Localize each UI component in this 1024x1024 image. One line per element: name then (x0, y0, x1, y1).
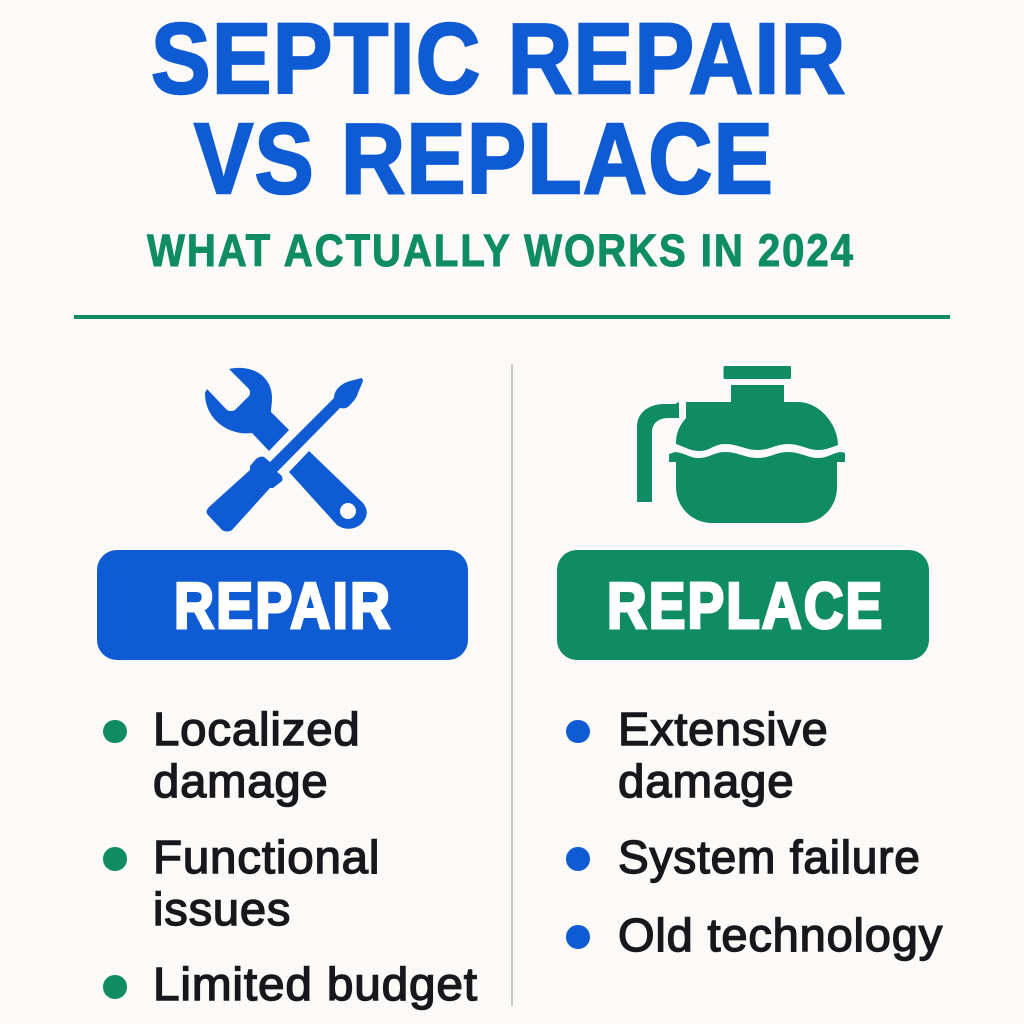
icon: wrench and screwdriver (205, 368, 367, 532)
list: repair: Limited budget (153, 958, 478, 1010)
button: replace (557, 550, 929, 660)
list: repair (103, 703, 478, 1010)
list: replace: Extensive (618, 703, 829, 755)
list: replace: Old technology (618, 909, 943, 961)
button: repair (97, 550, 468, 660)
subtitle: WHAT ACTUALLY WORKS IN 2024 (147, 225, 855, 276)
title: VS REPLACE (194, 103, 774, 215)
title: SEPTIC REPAIR (150, 3, 846, 115)
list: replace: System failure (618, 830, 921, 882)
list: repair: Functional (153, 830, 380, 882)
list: repair: Localized (153, 703, 361, 755)
list: replace (566, 703, 944, 962)
list: replace: damage (618, 755, 795, 807)
icon: septic tank (637, 366, 845, 523)
list: repair: damage (153, 755, 328, 807)
list: repair: issues (153, 883, 291, 935)
title (150, 3, 846, 215)
button label: repair: REPAIR (174, 569, 392, 642)
button label: replace: REPLACE (607, 569, 884, 642)
